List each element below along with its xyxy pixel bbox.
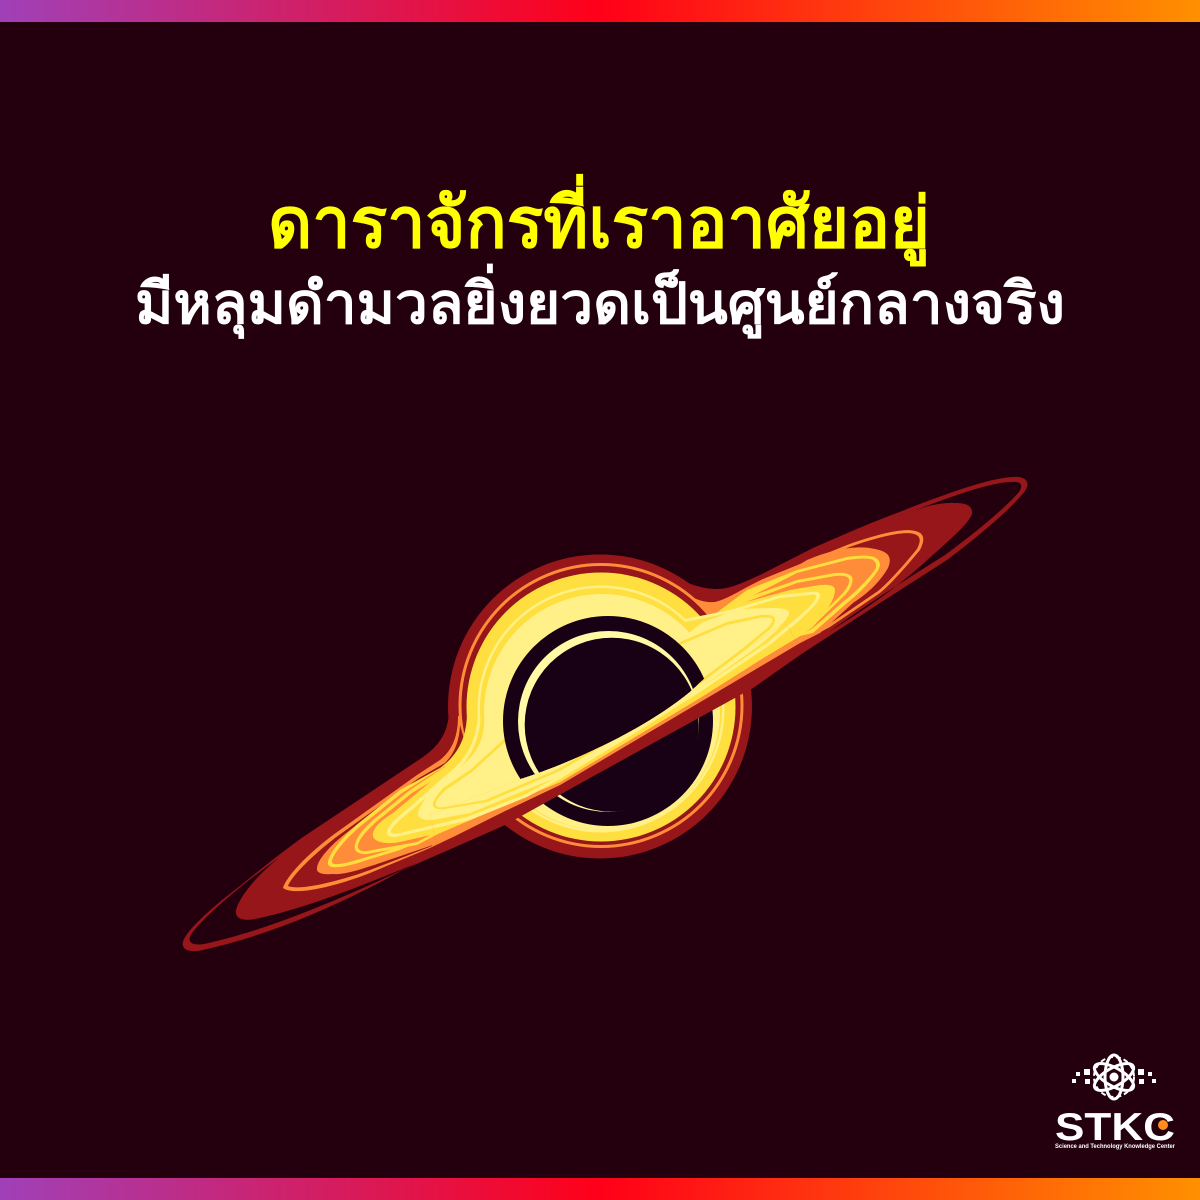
title (135, 173, 1065, 340)
orange filled lobe (317, 547, 890, 874)
logo orange dot (1158, 1120, 1168, 1130)
logo tagline: Science and Technology Knowledge Center (1055, 1143, 1175, 1150)
yellow gap layer (391, 588, 816, 834)
dark gaps inside thin ring (190, 482, 1021, 945)
black hole shadow ring (503, 616, 713, 826)
top gradient bar (0, 0, 1200, 22)
title line 2: มีหลุมดำมวลยิ่งยวดเป็นศูนย์กลางจริง (135, 263, 1065, 340)
black hole core (525, 638, 699, 812)
logo wordmark: STKC (1055, 1106, 1175, 1149)
yellow and orange disc bands (328, 556, 880, 867)
pale disc and lobe (418, 594, 789, 830)
yellow disc (466, 572, 736, 842)
photon ring crescent (518, 631, 699, 812)
outer red silhouette and thin ring (183, 477, 1027, 951)
red inner layer (288, 533, 920, 887)
front strip of accretion disc (430, 622, 803, 854)
title line 1: ดาราจักรที่เราอาศัยอยู่ (268, 173, 930, 267)
orange outline layer (283, 530, 923, 891)
inner pale lobe (436, 618, 772, 807)
inner yellow line lobe (433, 615, 775, 809)
icon: atom with pixel squares (1072, 1055, 1156, 1099)
black hole illustration (182, 476, 1028, 952)
pale line layer (387, 586, 820, 837)
bottom gradient bar (0, 1178, 1200, 1200)
